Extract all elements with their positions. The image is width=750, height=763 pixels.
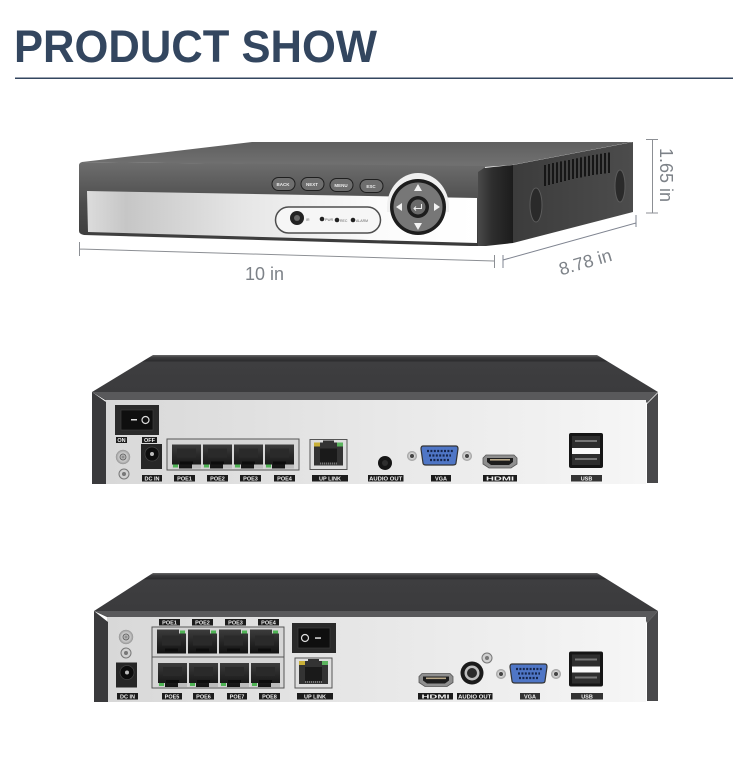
power switch xyxy=(115,405,159,444)
top cover xyxy=(92,355,658,400)
buttons: NEXT xyxy=(306,182,318,187)
DC input xyxy=(141,444,162,482)
buttons: BACK xyxy=(276,182,290,187)
lip xyxy=(92,392,658,403)
audio out xyxy=(368,456,404,482)
indicator pill xyxy=(276,207,380,233)
PoE ports: POE5 xyxy=(165,694,179,700)
PoE ports: POE4 xyxy=(261,620,277,626)
left side xyxy=(94,611,108,702)
PoE ports: POE1 xyxy=(177,476,192,482)
rear panel xyxy=(107,617,646,702)
HDMI xyxy=(418,674,453,700)
HDMI: HDMI xyxy=(422,694,450,700)
dimension: 8.78 in xyxy=(503,215,636,279)
rear panel xyxy=(105,400,646,484)
DC input: DC IN xyxy=(120,694,135,700)
ground screw xyxy=(119,630,133,658)
indicator pill: PWR xyxy=(325,218,334,222)
USB xyxy=(569,433,603,482)
power switch: OFF xyxy=(144,438,156,444)
rear view device: 4 PoE xyxy=(92,355,658,484)
right side xyxy=(647,393,658,483)
dimension: 10 in xyxy=(80,242,494,284)
PoE ports: POE4 xyxy=(277,476,293,482)
uplink port xyxy=(295,658,333,700)
silver panel xyxy=(87,191,477,243)
indicator pill: ALARM xyxy=(356,219,368,223)
title: PRODUCT SHOW xyxy=(14,21,377,72)
indicator pill: IR xyxy=(306,218,310,222)
buttons: MENU xyxy=(334,183,348,188)
PoE ports xyxy=(152,619,284,700)
uplink port: UP LINK xyxy=(304,694,326,700)
left side xyxy=(92,392,106,484)
PoE ports: POE2 xyxy=(195,620,210,626)
USB xyxy=(569,652,603,700)
power switch: ON xyxy=(117,438,126,444)
right side xyxy=(647,611,658,701)
audio out xyxy=(457,653,492,700)
dimension: 10 in: 10 in xyxy=(245,264,284,284)
audio out: AUDIO OUT xyxy=(458,694,492,700)
PoE ports: POE2 xyxy=(210,476,225,482)
uplink port xyxy=(310,440,348,482)
lip xyxy=(94,611,658,623)
top cover xyxy=(94,573,658,617)
PoE ports: POE6 xyxy=(196,694,211,700)
HDMI xyxy=(483,455,517,482)
HDMI: HDMI xyxy=(486,476,515,482)
PoE ports xyxy=(167,439,299,482)
DC input: DC IN xyxy=(145,476,160,482)
PoE ports: POE3 xyxy=(228,620,243,626)
PoE ports: POE3 xyxy=(243,476,258,482)
top surface xyxy=(82,142,632,167)
USB: USB xyxy=(581,694,593,700)
power switch xyxy=(292,623,336,653)
buttons xyxy=(272,178,383,192)
direction pad xyxy=(387,173,449,235)
PoE ports: POE1 xyxy=(162,620,177,626)
VGA xyxy=(407,446,472,482)
indicator pill: REC xyxy=(340,219,348,223)
dimension: 1.65 in: 1.65 in xyxy=(656,148,676,202)
PoE ports: POE8 xyxy=(262,694,277,700)
audio out: AUDIO OUT xyxy=(369,476,403,482)
right corner xyxy=(478,165,513,246)
front face xyxy=(79,162,485,246)
DC input xyxy=(116,662,138,700)
side panel with vents xyxy=(513,142,633,243)
VGA: VGA xyxy=(524,694,536,700)
buttons: ESC xyxy=(366,184,376,189)
VGA xyxy=(496,664,561,700)
USB: USB xyxy=(581,476,592,482)
rear view device: 8 PoE xyxy=(94,573,658,702)
front view device xyxy=(79,142,633,246)
dimension: 1.65 in xyxy=(646,140,676,213)
ground screw xyxy=(116,450,130,479)
VGA: VGA xyxy=(435,476,447,482)
title underline xyxy=(15,78,733,79)
uplink port: UP LINK xyxy=(319,476,341,482)
PoE ports: POE7 xyxy=(230,694,244,700)
dimension: 8.78 in: 8.78 in xyxy=(557,245,614,279)
